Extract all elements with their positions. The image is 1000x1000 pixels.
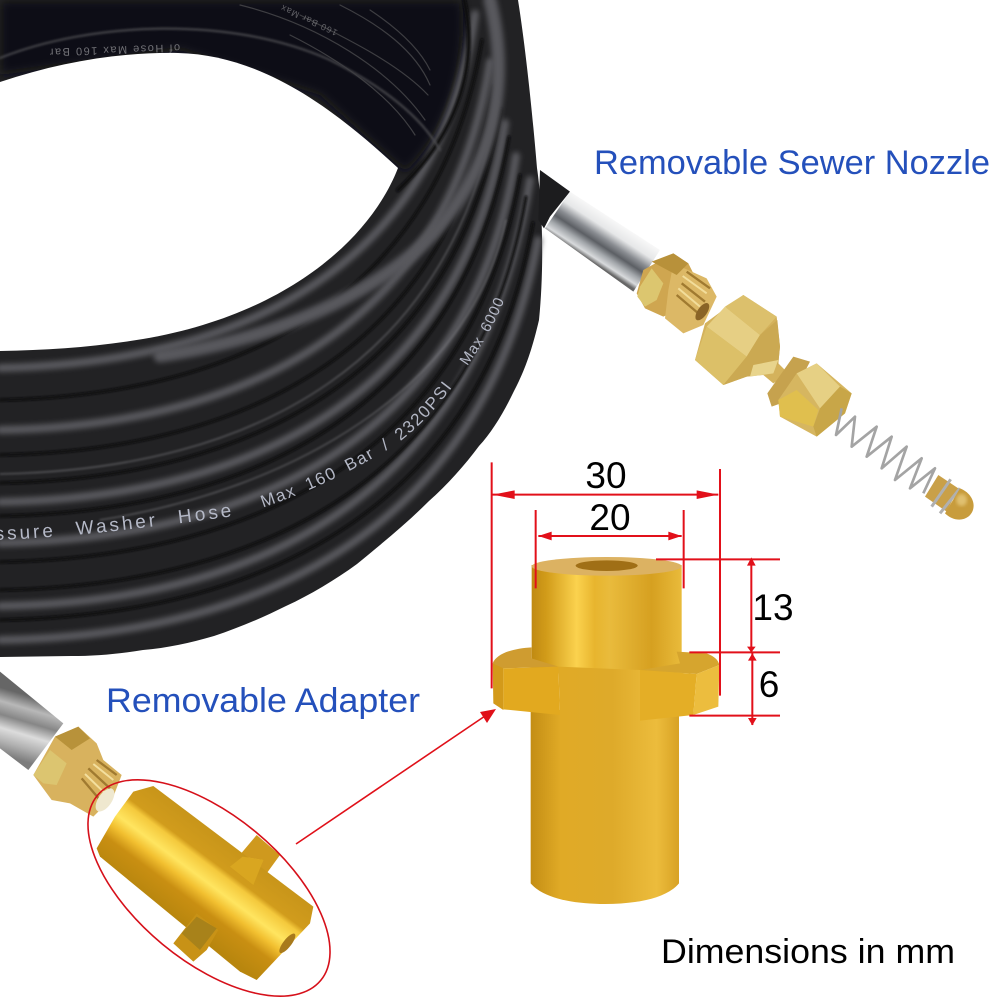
adapter body xyxy=(97,786,313,980)
label 30: 30 xyxy=(585,455,627,496)
steel ferrule xyxy=(545,192,660,292)
callout arrow xyxy=(296,709,496,844)
label 20: 20 xyxy=(589,497,631,538)
far side hose lines xyxy=(0,29,440,150)
dimension lines xyxy=(492,462,780,725)
coil silhouette xyxy=(0,0,542,657)
callout ellipse xyxy=(51,739,367,1000)
hose printed text: ssure Washer Hose Max 160 Bar / 2320PSI Max 6000 xyxy=(0,298,504,540)
flange root xyxy=(230,857,263,885)
hose printed text: of Hose Max 160 Bar xyxy=(48,41,180,58)
small adapter in circle xyxy=(97,786,313,980)
upper cylinder xyxy=(532,565,682,673)
heading: sewer nozzle: Removable Sewer Nozzle xyxy=(594,144,990,182)
far side shadow xyxy=(0,0,463,172)
hole of coil xyxy=(0,53,398,351)
threaded brass fitting xyxy=(33,727,122,817)
dimension labels xyxy=(585,455,794,705)
spring tip xyxy=(925,475,974,520)
large adapter xyxy=(493,557,719,904)
lower flange xyxy=(173,913,218,962)
label 6: 6 xyxy=(759,664,779,705)
top face xyxy=(532,557,682,576)
coil shading xyxy=(0,0,538,640)
lower cylinder xyxy=(531,710,679,904)
left hose end fitting xyxy=(0,672,122,817)
label 13: 13 xyxy=(752,587,794,628)
bore xyxy=(277,931,298,955)
black hose stub xyxy=(538,170,570,228)
top flange xyxy=(230,835,280,885)
spring xyxy=(836,408,935,493)
steel ferrule xyxy=(0,672,63,770)
right hose end fitting xyxy=(538,170,974,520)
nozzle xyxy=(695,295,852,437)
top hose wrap xyxy=(160,0,498,356)
threaded brass fitting xyxy=(637,253,717,333)
hose coil xyxy=(0,0,546,657)
heading: adapter: Removable Adapter xyxy=(106,682,420,720)
note: dimensions: Dimensions in mm xyxy=(661,933,955,971)
hose printed text: 160 Bar Max xyxy=(279,2,339,38)
flange xyxy=(493,647,719,721)
hose printed text xyxy=(0,2,512,540)
